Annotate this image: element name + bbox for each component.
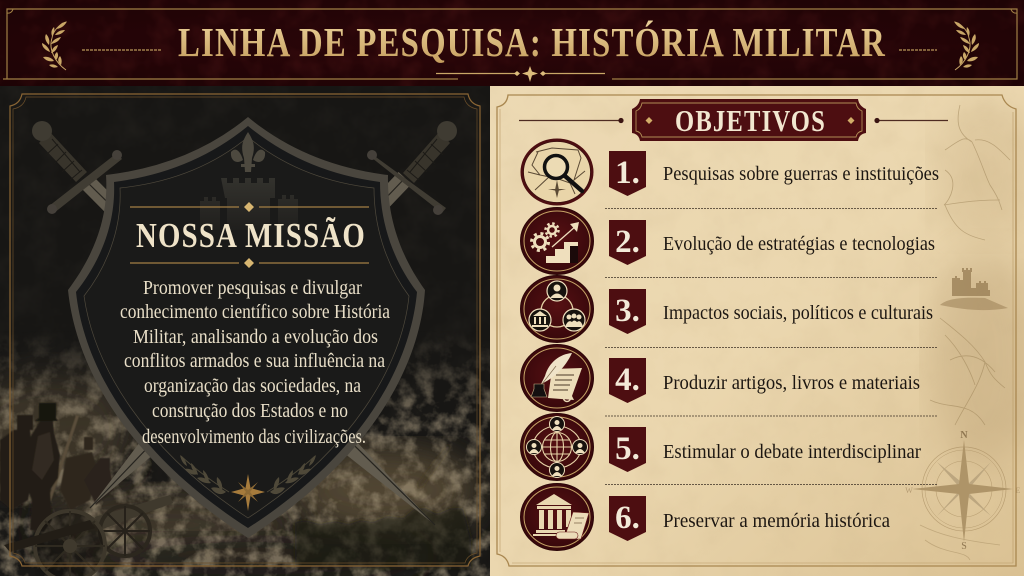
number badge 4 <box>609 358 646 403</box>
mission text: Militar, analisando a evolução dos <box>133 326 378 348</box>
item text 3: Impactos sociais, políticos e culturais <box>663 302 933 324</box>
compass rose: N <box>960 430 968 441</box>
mission text: conflitos armados e sua influência na <box>124 350 385 372</box>
item 6 <box>520 484 890 550</box>
item 2 <box>520 208 935 274</box>
icon: people and institution <box>520 276 594 342</box>
cannon <box>4 495 173 576</box>
number badge 5: 5. <box>615 431 640 467</box>
item text 5: Estimular o debate interdisciplinar <box>663 441 921 463</box>
background map <box>920 105 1010 560</box>
number badge 3: 3. <box>615 293 640 329</box>
mission text: desenvolvimento das civilizações. <box>142 426 366 448</box>
parchment frame <box>497 95 1016 566</box>
compass rose <box>905 430 1021 552</box>
icon: temple and scroll <box>520 484 594 550</box>
mission heading: NOSSA MISSÃO <box>136 216 366 255</box>
compass rose: S <box>961 541 967 552</box>
icon: quill and scroll <box>520 344 594 412</box>
mission text: construção dos Estados e no <box>152 400 348 422</box>
objectives heading: OBJETIVOS <box>675 103 826 138</box>
item 3 <box>520 276 933 342</box>
panel: header banner <box>0 0 1024 86</box>
item text 4: Produzir artigos, livros e materiais <box>663 372 920 394</box>
fleur-de-lis <box>231 132 265 172</box>
mission text: conhecimento científico sobre História <box>120 301 390 323</box>
number badge 1 <box>609 151 646 196</box>
right sword guard <box>369 152 446 213</box>
battle scene background <box>0 330 490 576</box>
icon: right laurel <box>954 22 979 70</box>
item text 1: Pesquisas sobre guerras e instituições <box>663 163 939 185</box>
icon: star and laurels <box>180 455 316 511</box>
panel: mission <box>0 86 490 576</box>
number badge 2: 2. <box>615 224 640 260</box>
item 1 <box>520 138 939 206</box>
objectives heading <box>519 99 948 141</box>
number badge 6: 6. <box>615 500 640 536</box>
mission heading <box>130 202 369 268</box>
compass rose: W <box>905 486 913 495</box>
frame <box>10 94 480 566</box>
castle illustration <box>940 268 1008 310</box>
item text 2: Evolução de estratégias e tecnologias <box>663 233 935 255</box>
icon: gears and stairs <box>520 208 594 274</box>
item 4 <box>520 344 920 412</box>
mission text: Promover pesquisas e divulgar <box>143 277 362 299</box>
soldiers <box>0 403 114 532</box>
number badge 1: 1. <box>615 155 640 191</box>
item 5 <box>520 414 921 480</box>
icon: globe and people <box>520 414 594 480</box>
panel: objectives <box>490 86 1024 576</box>
crossed swords <box>32 121 457 525</box>
number badge 2 <box>609 220 646 265</box>
distant troops <box>295 445 471 568</box>
item text 6: Preservar a memória histórica <box>663 510 890 532</box>
icon: map and magnifying glass <box>520 138 594 206</box>
compass rose: E <box>1016 486 1021 495</box>
mission text <box>120 277 390 448</box>
number badge 3 <box>609 289 646 334</box>
mission text: organização das sociedades, na <box>144 375 361 397</box>
right sword <box>90 121 457 508</box>
shield <box>68 117 425 538</box>
number badge 4: 4. <box>615 362 640 398</box>
castle <box>200 178 298 230</box>
number badge 5 <box>609 427 646 472</box>
number badge 6 <box>609 496 646 541</box>
icon: left laurel <box>42 22 67 70</box>
header ornament <box>436 66 605 82</box>
left sword guard <box>49 153 122 213</box>
left sword <box>32 121 435 525</box>
